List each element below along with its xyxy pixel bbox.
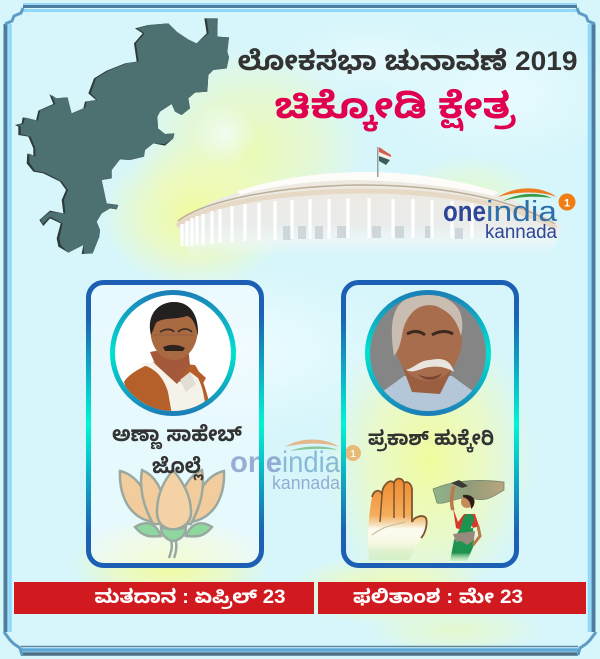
candidate 1 name: ಅಣ್ಣಾ ಸಾಹೇಬ್	[112, 423, 242, 450]
portrait: candidate 1	[112, 292, 234, 415]
candidate 2 name: ಪ್ರಕಾಶ್ ಹುಕ್ಕೇರಿ	[368, 428, 494, 453]
watermark logo: 1	[350, 449, 356, 460]
logo: oneindia kannada: 1	[564, 198, 570, 210]
candidate 1 name	[112, 423, 242, 481]
portrait: candidate 2	[368, 292, 488, 415]
logo: oneindia kannada	[443, 188, 576, 243]
date bar: polling: ಮತದಾನ : ಏಪ್ರಿಲ್ 23	[94, 587, 286, 609]
heading: constituency name: ಚಿಕ್ಕೋಡಿ ಕ್ಷೇತ್ರ	[274, 85, 516, 132]
date bar: polling	[14, 582, 314, 614]
watermark logo	[230, 440, 361, 493]
date bar: results	[318, 582, 586, 614]
heading: election 2019: ಲೋಕಸಭಾ ಚುನಾವಣೆ 2019	[238, 46, 578, 76]
logo: oneindia kannada: kannada	[485, 222, 557, 243]
candidate 1 name: ಜೊಲ್ಲೆ	[152, 455, 204, 481]
date bar: results: ಫಲಿತಾಂಶ : ಮೇ 23	[353, 587, 523, 608]
watermark logo: india	[282, 446, 340, 479]
parliament building	[177, 147, 562, 258]
icon: congress hand	[368, 478, 427, 560]
watermark logo: one	[230, 446, 282, 479]
panel: candidate 1	[88, 282, 262, 566]
logo: oneindia kannada: india	[486, 196, 558, 228]
panel: candidate 2	[344, 282, 516, 566]
icon: lotus	[120, 470, 224, 558]
logo: oneindia kannada: one	[443, 196, 486, 228]
watermark logo: kannada	[272, 473, 341, 493]
icon: woman with crop	[433, 480, 504, 561]
map of constituency	[15, 18, 229, 254]
